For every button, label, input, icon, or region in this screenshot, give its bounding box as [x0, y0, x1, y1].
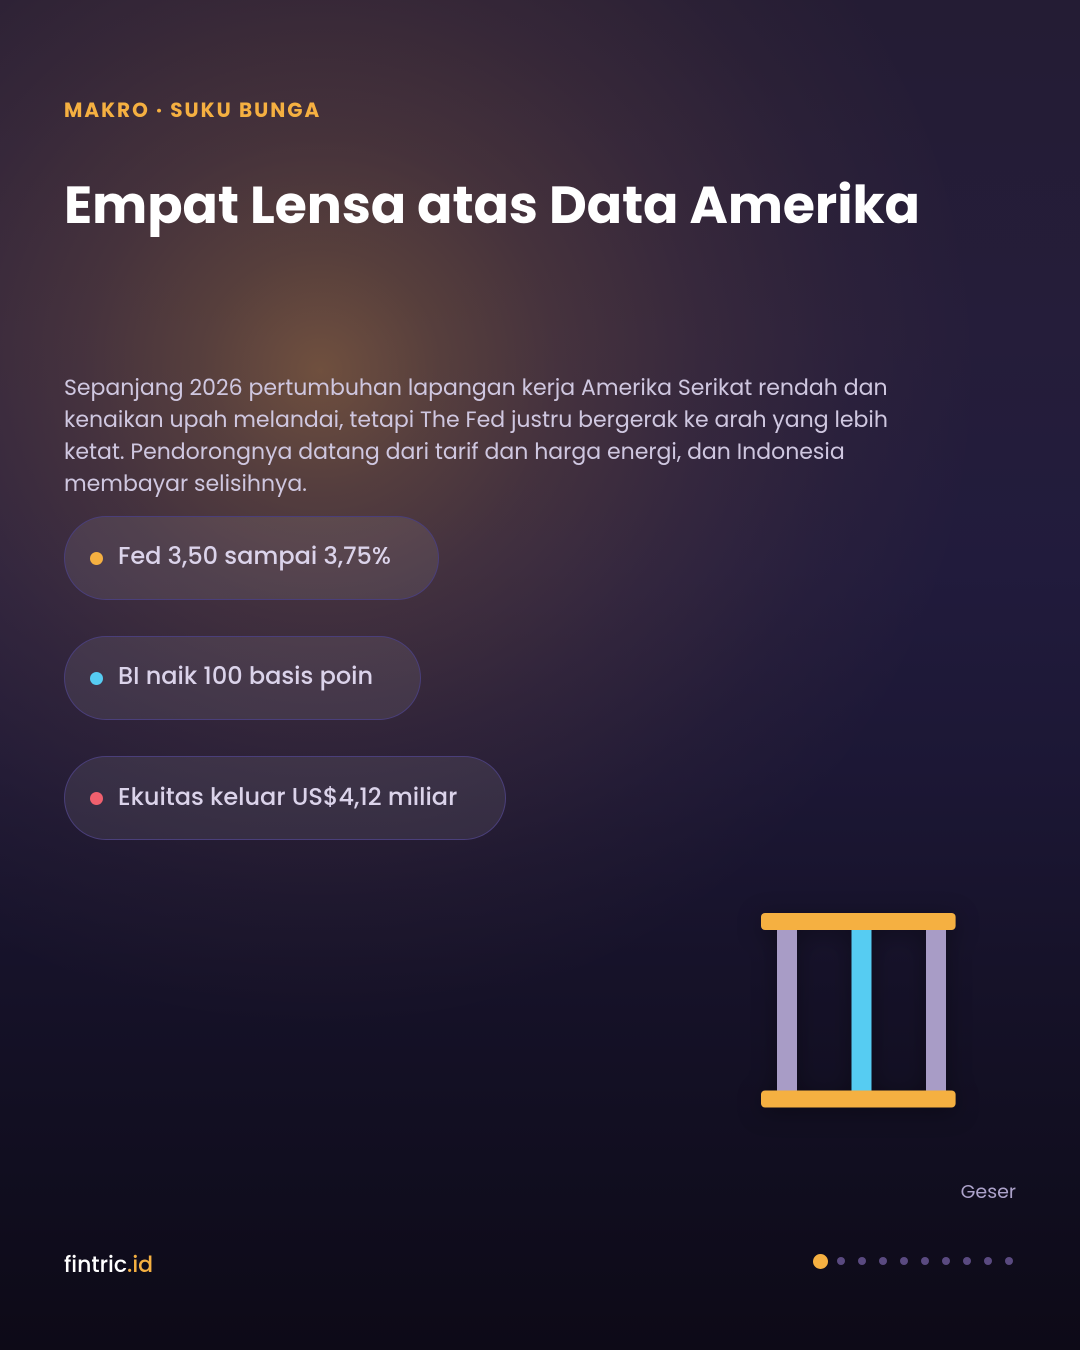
intro paragraph — [64, 372, 888, 499]
brand logo: fintric.id — [64, 1249, 153, 1280]
intro paragraph: membayar selisihnya. — [64, 468, 307, 499]
title: Empat Lensa atas Data Amerika — [64, 169, 920, 242]
intro paragraph: kenaikan upah melandai, tetapi The Fed justru bergerak ke arah yang lebih — [64, 404, 888, 435]
pill: equity outflow — [64, 756, 506, 840]
pill: BI rate — [64, 636, 421, 720]
pill: BI rate: BI naik 100 basis poin — [118, 660, 373, 693]
pill: Fed rate — [64, 516, 439, 600]
intro paragraph: Sepanjang 2026 pertumbuhan lapangan kerja Amerika Serikat rendah dan — [64, 372, 888, 403]
eyebrow label: MAKRO · SUKU BUNGA — [64, 96, 321, 124]
intro paragraph: ketat. Pendorongnya datang dari tarif dan harga energi, dan Indonesia — [64, 436, 845, 467]
pill: Fed rate: Fed 3,50 sampai 3,75% — [118, 540, 391, 573]
swipe hint: Geser — [961, 1178, 1016, 1205]
pill: equity outflow: Ekuitas keluar US$4,12 miliar — [118, 781, 457, 814]
